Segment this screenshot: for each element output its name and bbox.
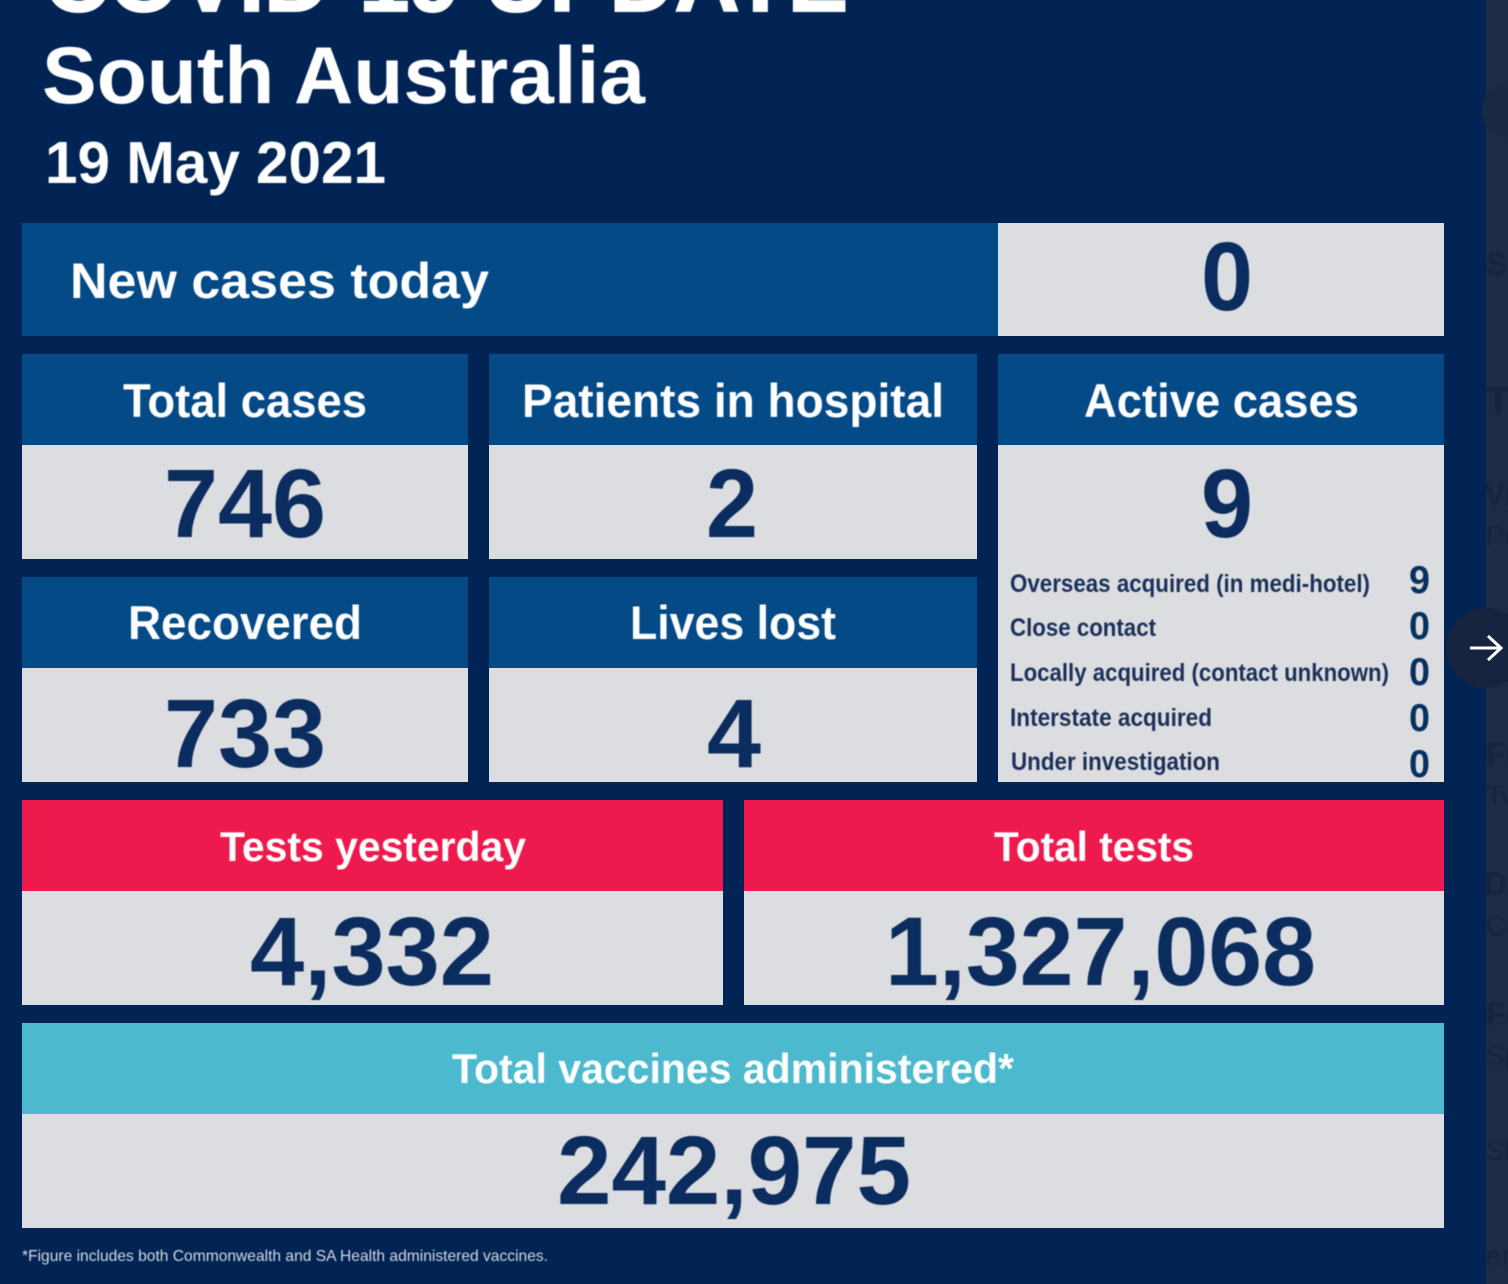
active cases breakdown list: 0: [1409, 651, 1430, 694]
panel: lives lost: [489, 577, 977, 788]
panel: active cases: [998, 354, 1444, 786]
active cases breakdown list: [1010, 559, 1430, 786]
panel: patients in hospital: [489, 354, 977, 559]
footnote: *Figure includes both Commonwealth and SA Health administered vaccines.: [22, 1248, 548, 1265]
heading: South Australia: South Australia: [42, 31, 646, 121]
active cases breakdown list: 0: [1409, 605, 1430, 648]
active cases breakdown list: 0: [1409, 743, 1430, 786]
panel: tests yesterday: 4,332: [250, 897, 494, 1006]
panel: total cases: [22, 354, 468, 559]
panel: recovered: [22, 577, 468, 788]
panel: total vaccines administered: Total vaccines administered*: [452, 1045, 1015, 1092]
icon: carousel arrow button: [1446, 608, 1508, 688]
active cases breakdown list: Locally acquired (contact unknown): [1010, 659, 1389, 687]
active cases breakdown list: 9: [1409, 559, 1430, 602]
panel: total vaccines administered: 242,975: [557, 1116, 911, 1225]
panel: new cases today: 0: [1201, 222, 1253, 331]
active cases breakdown list: Under investigation: [1011, 748, 1220, 776]
panel: recovered: Recovered: [128, 596, 362, 649]
panel: total tests: 1,327,068: [885, 897, 1316, 1006]
active cases breakdown list: 0: [1409, 697, 1430, 740]
panel: recovered: 733: [164, 679, 326, 788]
panel: total tests: Total tests: [994, 823, 1194, 870]
panel: active cases: 9: [1201, 449, 1253, 558]
panel: tests yesterday: [22, 800, 723, 1006]
panel: total cases: Total cases: [123, 374, 367, 427]
panel: patients in hospital: Patients in hospital: [522, 374, 944, 427]
panel: total cases: 746: [164, 449, 326, 558]
panel: active cases: Active cases: [1084, 374, 1359, 427]
date: 19 May 2021: [45, 130, 386, 196]
panel: new cases today: [22, 222, 1444, 336]
background page strip: [1482, 0, 1508, 1284]
panel: lives lost: Lives lost: [630, 596, 836, 649]
panel: lives lost: 4: [707, 679, 761, 788]
panel: patients in hospital: 2: [706, 449, 758, 558]
panel: tests yesterday: Tests yesterday: [220, 823, 527, 870]
active cases breakdown list: Overseas acquired (in medi-hotel): [1010, 570, 1370, 598]
panel: total vaccines administered: [22, 1023, 1444, 1228]
panel: new cases today: New cases today: [70, 253, 489, 309]
active cases breakdown list: Interstate acquired: [1010, 704, 1212, 732]
active cases breakdown list: Close contact: [1010, 614, 1157, 642]
panel: total tests: [744, 800, 1444, 1006]
